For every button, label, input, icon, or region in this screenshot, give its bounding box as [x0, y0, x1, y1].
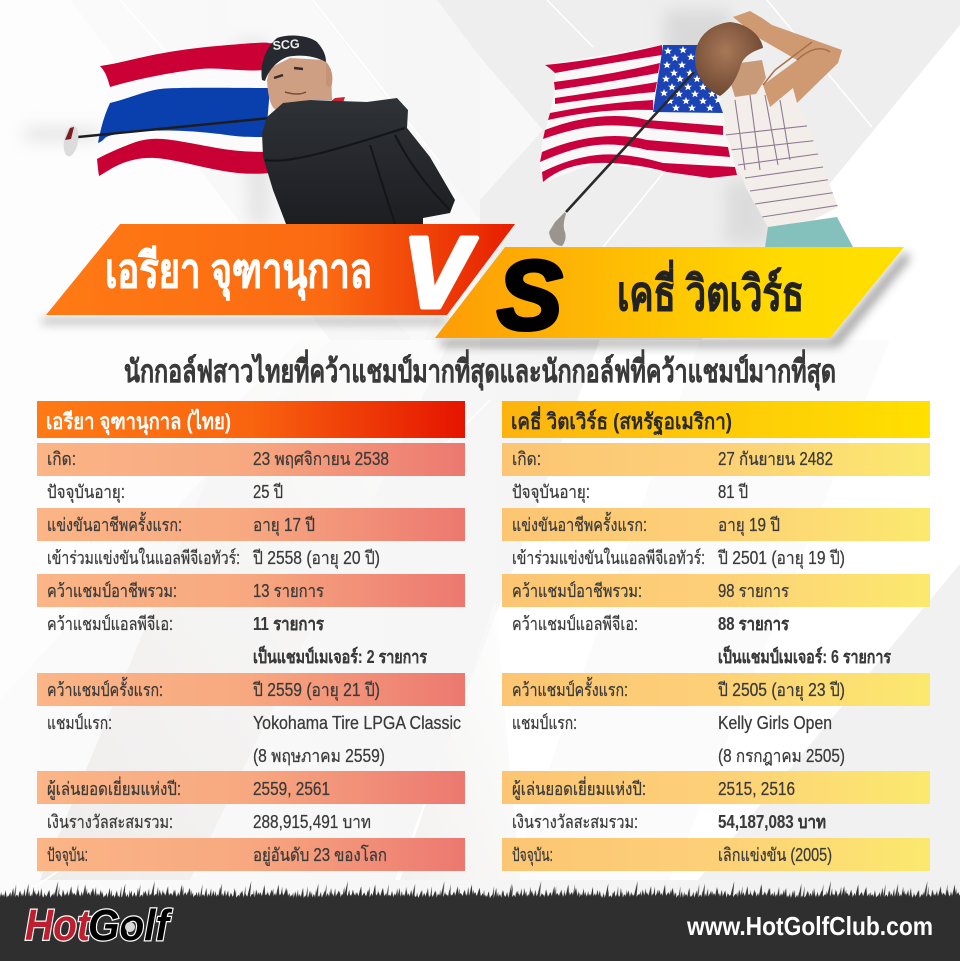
row labels: คว้าแชมป์อาชีพรวม:: [512, 581, 642, 601]
HotGolf logo: Hot: [25, 901, 92, 950]
panel: Kathy stats table: [502, 401, 930, 871]
row values: ปี 2501 (อายุ 19 ปี): [718, 548, 845, 569]
golf club: iron: [549, 72, 694, 246]
row values: 81 ปี: [718, 482, 748, 502]
row values: [253, 449, 461, 866]
teal shorts: [765, 217, 853, 247]
player: Kathy Whitworth: [549, 11, 853, 247]
row values: 23 พฤศจิกายน 2538: [253, 449, 389, 469]
hair: [695, 22, 763, 96]
row labels: เข้าร่วมแข่งขันในแอลพีจีเอทัวร์:: [47, 547, 240, 568]
table header: เคธี่ วิตเวิร์ธ (สหรัฐอเมริกา): [511, 405, 732, 436]
row labels: ผู้เล่นยอดเยี่ยมแห่งปี:: [512, 776, 646, 800]
row labels: [47, 449, 240, 866]
row labels: เกิด:: [512, 449, 541, 469]
row values: ปี 2558 (อายุ 20 ปี): [253, 548, 380, 569]
banner: Ariya name: เอรียา จุฑานุกาล: [105, 245, 372, 301]
jacket: [262, 98, 455, 224]
row values: 98 รายการ: [718, 581, 789, 601]
row values: 27 กันยายน 2482: [718, 449, 833, 469]
row values: ปี 2559 (อายุ 21 ปี): [253, 680, 380, 701]
row values: 88 รายการ: [718, 614, 789, 634]
player: Ariya Jutanugarn: SCG: [272, 37, 300, 53]
player: Ariya Jutanugarn: [61, 35, 455, 224]
banner shadows: [42, 252, 910, 346]
soft shadows behind players: [25, 10, 770, 245]
row labels: คว้าแชมป์อาชีพรวม:: [47, 581, 177, 601]
row values: 288,915,491 บาท: [253, 812, 371, 832]
row labels: เกิด:: [47, 449, 76, 469]
row values: Yokohama Tire LPGA Classic: [253, 713, 461, 733]
panel: Ariya stats table: [37, 401, 465, 871]
face: [267, 58, 332, 110]
banner: Kathy name: [435, 247, 904, 338]
row labels: ปัจจุบันอายุ:: [512, 482, 590, 503]
table header: [37, 401, 465, 438]
row labels: เข้าร่วมแข่งขันในแอลพีจีเอทัวร์:: [512, 547, 705, 568]
row labels: แข่งขันอาชีพครั้งแรก:: [47, 512, 182, 535]
arms and hands: [733, 11, 842, 107]
row labels: คว้าแชมป์แอลพีจีเอ:: [512, 614, 638, 634]
row values: 2559, 2561: [253, 779, 330, 799]
table header: [502, 401, 930, 438]
striped shirt: [723, 85, 838, 227]
cap: [262, 35, 326, 81]
row values: 54,187,083 บาท: [718, 812, 826, 832]
footer bar: [0, 898, 960, 961]
row values: Kelly Girls Open: [718, 713, 832, 733]
USA flag: [540, 45, 737, 182]
HotGolf logo: Golf: [88, 901, 173, 950]
row values: 2515, 2516: [718, 779, 795, 799]
row values: อายุ 17 ปี: [253, 515, 315, 536]
row labels: เงินรางวัลสะสมรวม:: [512, 812, 638, 832]
row labels: ปัจจุบัน:: [512, 845, 553, 866]
row values: (8 พฤษภาคม 2559): [253, 746, 385, 766]
row backgrounds: [37, 443, 465, 871]
website URL: www.HotGolfClub.com: [686, 911, 933, 941]
row labels: ปัจจุบัน:: [47, 845, 88, 866]
row labels: คว้าแชมป์ครั้งแรก:: [47, 677, 163, 700]
row values: 25 ปี: [253, 482, 283, 502]
row values: อยู่อันดับ 23 ของโลก: [253, 844, 387, 866]
table header: เอรียา จุฑานุกาล (ไทย): [46, 408, 231, 436]
row labels: [512, 449, 705, 866]
row values: เลิกแข่งขัน (2005): [718, 845, 832, 865]
grass silhouette: [0, 881, 960, 900]
row values: เป็นแชมป์เมเจอร์: 6 รายการ: [718, 645, 891, 667]
row values: [718, 449, 891, 865]
face: [725, 60, 766, 97]
Thai flag: [97, 43, 272, 176]
letter S: S: [497, 240, 562, 350]
row labels: คว้าแชมป์ครั้งแรก:: [512, 677, 628, 700]
row labels: แชมป์แรก:: [47, 713, 112, 733]
banner: Kathy name: เคธี่ วิตเวิร์ธ: [617, 259, 804, 321]
row values: ปี 2505 (อายุ 23 ปี): [718, 680, 845, 701]
row values: อายุ 19 ปี: [718, 515, 780, 536]
row values: 13 รายการ: [253, 581, 324, 601]
letter V: V: [403, 217, 477, 329]
row values: เป็นแชมป์เมเจอร์: 2 รายการ: [253, 645, 427, 667]
row values: 11 รายการ: [253, 614, 324, 634]
golf club: driver: [61, 118, 270, 157]
row labels: เงินรางวัลสะสมรวม:: [47, 812, 173, 832]
row labels: แข่งขันอาชีพครั้งแรก:: [512, 512, 647, 535]
row labels: แชมป์แรก:: [512, 713, 577, 733]
row backgrounds: [502, 443, 930, 871]
row labels: คว้าแชมป์แอลพีจีเอ:: [47, 614, 173, 634]
row values: (8 กรกฎาคม 2505): [718, 746, 845, 766]
banner: Ariya name: [46, 224, 515, 315]
HotGolf logo: [25, 901, 173, 950]
row labels: ผู้เล่นยอดเยี่ยมแห่งปี:: [47, 776, 181, 800]
row labels: ปัจจุบันอายุ:: [47, 482, 125, 503]
